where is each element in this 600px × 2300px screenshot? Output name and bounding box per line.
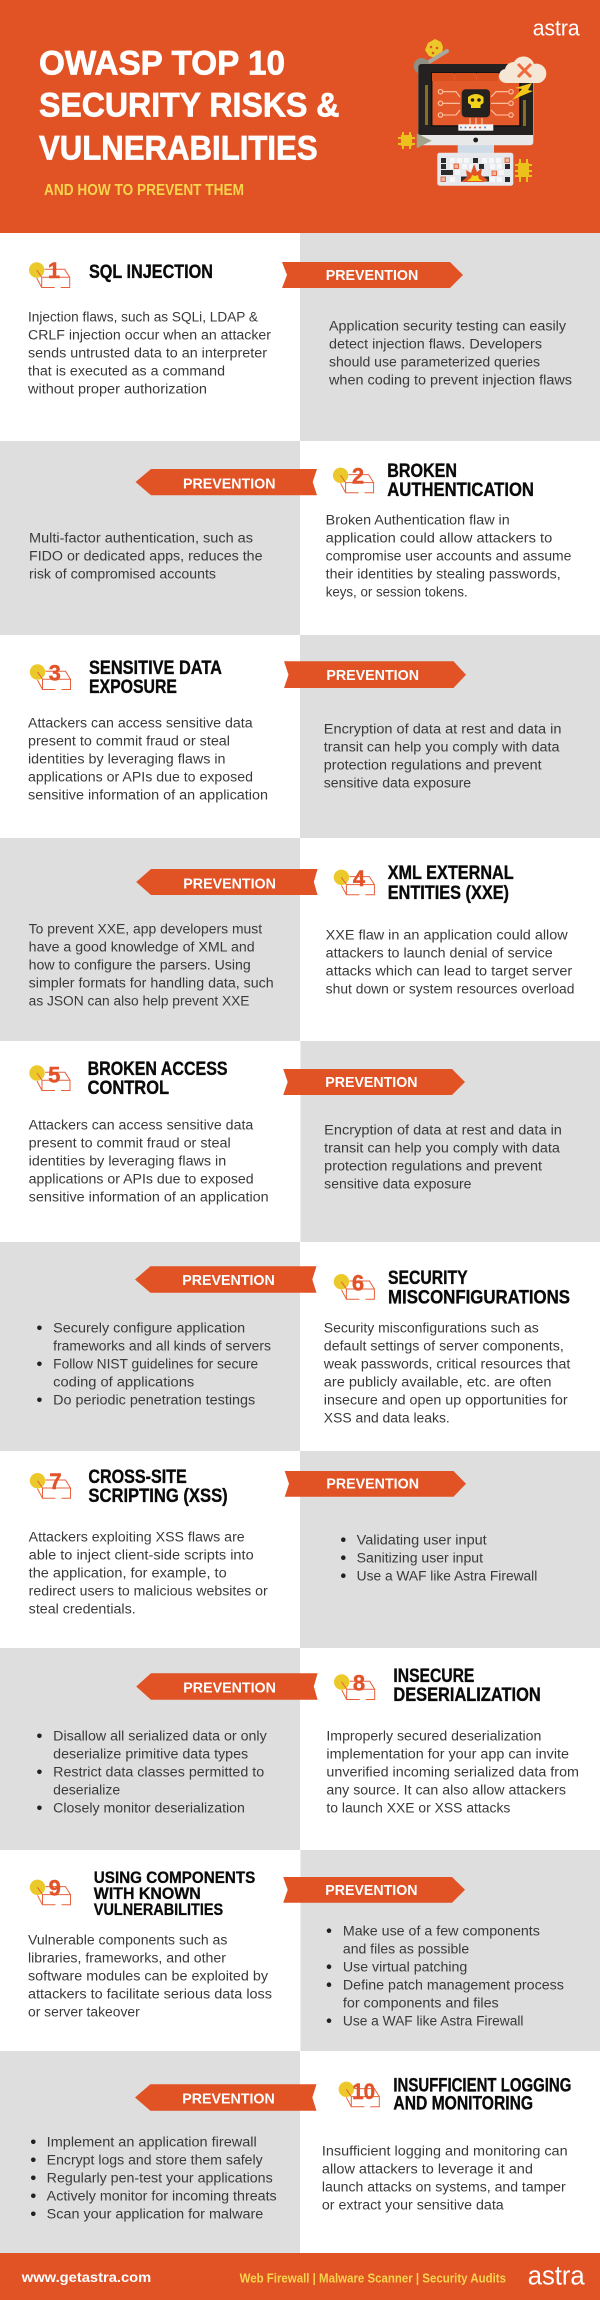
risk description: attackers to launch denial of service [326,945,553,960]
prevention list: deserialize primitive data types [53,1746,248,1761]
risk description: Insufficient logging and monitoring can [322,2143,568,2158]
icon: number 6 [334,1270,374,1299]
panel: 2 broken authentication [0,441,600,635]
heading: BROKEN [387,461,457,482]
risk description: Attackers can access sensitive data [28,715,253,730]
risk description: software modules can be exploited by [28,1968,268,1983]
panel: 3 sensitive data exposure [0,635,600,838]
heading [88,1059,228,1099]
risk description: insecure and open up opportunities for [324,1392,568,1407]
icon: cloud with cross [499,56,546,83]
prevention ribbon [136,1673,318,1700]
panel: 4 XML external entities [0,838,600,1041]
prevention list: Follow NIST guidelines for secure [53,1356,258,1371]
risk description: Broken Authentication flaw in [326,512,510,527]
heading: AND MONITORING [393,2093,533,2114]
prevention list: Closely monitor deserialization [53,1800,245,1815]
astra logo: astra [528,2261,586,2291]
prevention list: Use a WAF like Astra Firewall [357,1568,537,1583]
icon: number 5 [29,1062,70,1090]
heading: XML EXTERNAL [388,863,514,884]
prevention list [327,1923,564,2028]
prevention text: risk of compromised accounts [29,566,216,581]
panel: 5 broken access control [0,1041,600,1242]
icon: key [414,39,447,74]
heading: ENTITIES (XXE) [388,883,509,904]
risk description: application could allow attackers to [326,530,552,545]
icon: number 9: 9 [49,1876,61,1900]
prevention list [341,1532,537,1583]
risk description [326,512,571,599]
icon: number 1: 1 [48,258,60,283]
heading [88,1467,228,1507]
risk description: allow attackers to leverage it and [322,2161,533,2176]
risk description: the application, for example, to [29,1565,227,1580]
prevention ribbon: PREVENTION [183,875,276,892]
risk description: Attackers exploiting XSS flaws are [29,1529,245,1544]
prevention ribbon: PREVENTION [182,1272,275,1289]
prevention text: should use parameterized queries [329,354,540,369]
risk description: compromise user accounts and assume [326,548,571,563]
risk description: or extract your sensitive data [322,2197,504,2212]
prevention list [37,1320,271,1407]
prevention ribbon: PREVENTION [325,1882,418,1899]
panel: 1 SQL injection [0,233,600,441]
prevention text [29,921,274,1008]
risk description [323,1320,571,1425]
risk description [326,927,574,996]
heading: INSECURE [393,1666,474,1687]
heading: CROSS-SITE [88,1467,187,1488]
heading [388,1268,570,1308]
prevention list: Regularly pen-test your applications [47,2170,273,2185]
prevention list: Do periodic penetration testings [53,1392,255,1407]
prevention list: Encrypt logs and store them safely [47,2152,263,2167]
panel: 7 cross-site scripting [0,1451,600,1648]
risk description: XXE flaw in an application could allow [326,927,568,942]
risk description: libraries, frameworks, and other [28,1950,227,1965]
heading: SQL INJECTION [89,262,213,283]
prevention ribbon [136,869,318,895]
risk description: sensitive information of an application [29,1189,269,1204]
prevention list: Make use of a few components [343,1923,540,1938]
prevention list: Disallow all serialized data or only [53,1728,267,1743]
prevention list: Sanitizing user input [357,1550,483,1565]
prevention text: sensitive data exposure [324,775,471,790]
risk description: that is executed as a command [28,363,225,378]
prevention list: coding of applications [53,1374,194,1389]
prevention ribbon [284,661,466,688]
risk description [322,2143,568,2212]
risk description: applications or APIs due to exposed [29,1171,254,1186]
risk description: CRLF injection occur when an attacker [28,327,272,342]
icon: number 3 [30,660,70,690]
prevention text: when coding to prevent injection flaws [328,372,572,387]
astra logo: astra [533,16,580,41]
prevention list: Define patch management process [343,1977,564,1992]
risk description: attackers to facilitate serious data loss [28,1986,272,2001]
prevention text: have a good knowledge of XML and [29,939,255,954]
prevention list: frameworks and all kinds of servers [53,1338,271,1353]
prevention ribbon [282,262,463,288]
risk description [27,309,272,396]
risk description: Attackers can access sensitive data [29,1117,254,1132]
icon: number 4 [334,866,374,895]
prevention ribbon [283,1877,465,1903]
prevention list: and files as possible [343,1941,469,1956]
risk description: sends untrusted data to an interpreter [28,345,268,360]
icon: number 7 [30,1469,70,1498]
prevention text: Multi-factor authentication, such as [29,530,253,545]
prevention text [29,530,262,581]
risk description: redirect users to malicious websites or [29,1583,268,1598]
risk description: sensitive information of an application [28,787,268,802]
prevention list [31,2134,277,2221]
heading [393,1666,541,1706]
risk description: steal credentials. [29,1601,136,1616]
risk description: present to commit fraud or steal [29,1135,231,1150]
title [39,45,339,167]
risk description [326,1728,579,1815]
icon: number 8: 8 [353,1670,365,1696]
icon: number 1 [29,258,70,288]
prevention text: FIDO or dedicated apps, reduces the [29,548,262,563]
prevention text: simpler formats for handling data, such [29,975,274,990]
heading: AUTHENTICATION [387,480,534,501]
heading: WITH KNOWN [94,1884,201,1903]
prevention text: Encryption of data at rest and data in [324,1122,562,1137]
heading [89,658,222,698]
risk description [28,715,268,802]
risk description: identities by leveraging flaws in [29,1153,226,1168]
risk description: implementation for your app can invite [326,1746,569,1761]
prevention text: detect injection flaws. Developers [329,336,542,351]
prevention text [324,721,562,790]
panel: 8 insecure deserialization [0,1648,600,1850]
prevention list: Use virtual patching [343,1959,467,1974]
risk description: without proper authorization [27,381,207,396]
prevention ribbon [136,469,317,495]
icon: number 10: 10 [352,2079,375,2104]
panel: 6 security misconfigurations [0,1242,600,1451]
risk description: are publicly available, etc. are often [324,1374,552,1389]
icon: keyboard [437,153,513,186]
icon: number 8 [334,1670,375,1700]
prevention list: Use a WAF like Astra Firewall [343,2013,524,2028]
risk description [29,1117,269,1204]
icon: number 10 [339,2079,379,2107]
prevention list: Actively monitor for incoming threats [47,2188,277,2203]
prevention list: deserialize [53,1782,120,1797]
risk description: attacks which can lead to target server [326,963,573,978]
prevention text: protection regulations and prevent [324,757,542,772]
heading: SENSITIVE DATA [89,658,222,679]
prevention ribbon: PREVENTION [325,1074,418,1091]
header banner [0,0,600,233]
prevention list: Implement an application firewall [47,2134,257,2149]
prevention ribbon: PREVENTION [326,667,419,684]
risk description: Improperly secured deserialization [326,1728,541,1743]
prevention list [37,1728,267,1815]
heading: SECURITY [388,1268,468,1289]
heading: USING COMPONENTS [94,1868,255,1887]
risk description: weak passwords, critical resources that [323,1356,571,1371]
risk description: to launch XXE or XSS attacks [326,1800,511,1815]
prevention text: Application security testing can easily [329,318,566,333]
prevention ribbon [285,1471,466,1497]
title: OWASP TOP 10 [39,45,285,83]
prevention text: Encryption of data at rest and data in [324,721,562,736]
heading: SCRIPTING (XSS) [88,1486,228,1507]
heading [387,461,534,501]
icon: explosion [461,164,488,182]
prevention ribbon [135,1266,316,1293]
heading: BROKEN ACCESS [88,1059,228,1080]
footer [0,2253,600,2300]
prevention list: Scan your application for malware [47,2206,263,2221]
icon: number 7: 7 [49,1469,62,1494]
prevention text [324,1122,562,1191]
risk description: applications or APIs due to exposed [28,769,253,784]
risk description: any source. It can also allow attackers [326,1782,566,1797]
risk description: their identities by stealing passwords, [326,566,561,581]
prevention list: Restrict data classes permitted to [53,1764,264,1779]
panel: 9 using components with known vulnerabilities [0,1850,600,2051]
prevention ribbon [135,2084,316,2111]
prevention ribbon [283,1069,465,1095]
title: SECURITY RISKS & [39,87,339,125]
heading: VULNERABILITIES [94,1900,223,1919]
prevention ribbon: PREVENTION [326,1476,419,1493]
risk description: default settings of server components, [324,1338,564,1353]
risk description: identities by leveraging flaws in [28,751,226,766]
website url: www.getastra.com [21,2269,151,2285]
prevention list: for components and files [343,1995,499,2010]
prevention text [328,318,572,387]
risk description: shut down or system resources overload [326,981,574,996]
services list: Web Firewall | Malware Scanner | Security Audits [240,2270,506,2285]
heading [388,863,514,904]
icon: bug left with arrow [398,132,432,149]
prevention ribbon: PREVENTION [183,1679,276,1696]
heading: CONTROL [88,1078,169,1099]
prevention ribbon: PREVENTION [183,475,276,492]
prevention list: Securely configure application [53,1320,245,1335]
heading: MISCONFIGURATIONS [388,1287,570,1308]
icon: number 2: 2 [352,464,364,488]
icon: number 3: 3 [49,660,61,686]
heading: EXPOSURE [89,677,177,698]
risk description: launch attacks on systems, and tamper [322,2179,566,2194]
icon: number 9 [30,1876,70,1905]
risk description [29,1529,268,1616]
prevention text: protection regulations and prevent [324,1158,542,1173]
title: VULNERABILITIES [39,129,318,167]
icon: number 5: 5 [48,1062,60,1088]
risk description: Vulnerable components such as [28,1932,228,1947]
risk description: or server takeover [28,2004,140,2019]
subtitle: AND HOW TO PREVENT THEM [44,182,244,199]
icon: number 6: 6 [352,1270,364,1296]
risk description: XSS and data leaks. [324,1410,450,1425]
heading [94,1868,255,1919]
panel: 10 insufficient logging and monitoring [0,2051,600,2254]
risk description [28,1932,272,2019]
icon: number 2 [333,464,374,493]
prevention ribbon: PREVENTION [182,2090,275,2107]
risk description: keys, or session tokens. [326,584,468,599]
risk description: present to commit fraud or steal [28,733,230,748]
prevention text: as JSON can also help prevent XXE [29,993,250,1008]
icon: lightning bolt [512,83,533,100]
prevention text: sensitive data exposure [324,1176,472,1191]
heading: DESERIALIZATION [393,1685,541,1706]
illustration: hacked computer [398,39,546,186]
risk description: Injection flaws, such as SQLi, LDAP & [28,309,258,324]
risk description: unverified incoming serialized data from [326,1764,579,1779]
icon: monitor [418,64,533,153]
icon: number 4: 4 [353,866,366,891]
prevention ribbon: PREVENTION [326,267,418,284]
icon: bug right [515,159,532,182]
prevention list: Validating user input [357,1532,487,1547]
prevention text: transit can help you comply with data [324,739,560,754]
prevention text: To prevent XXE, app developers must [29,921,262,936]
prevention text: how to configure the parsers. Using [29,957,251,972]
risk description: Security misconfigurations such as [324,1320,539,1335]
risk description: able to inject client-side scripts into [29,1547,254,1562]
heading [393,2075,571,2114]
prevention text: transit can help you comply with data [324,1140,560,1155]
